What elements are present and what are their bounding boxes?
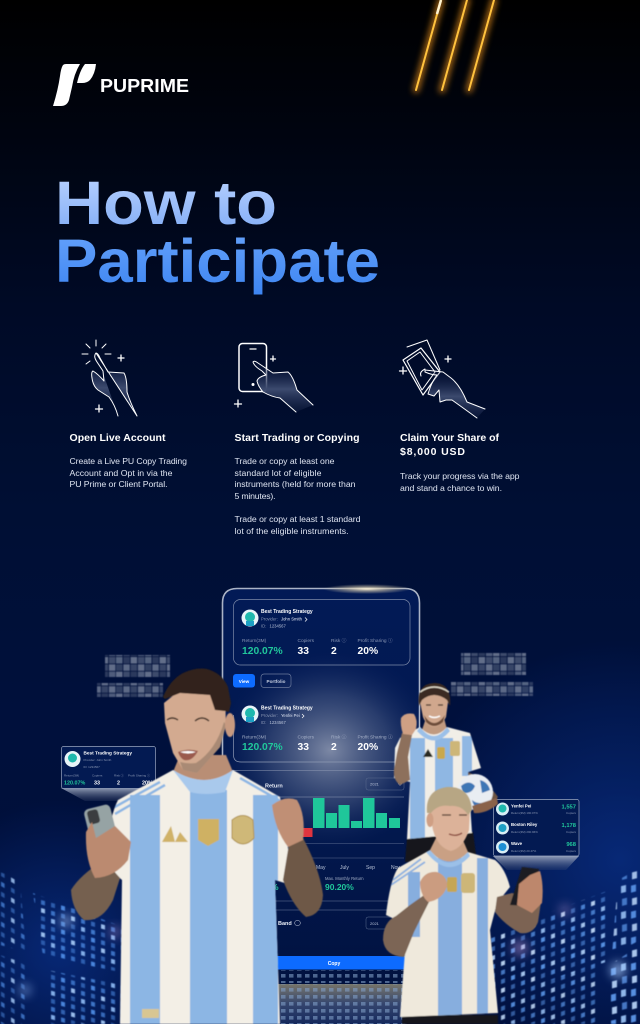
step 1 text [70,432,187,489]
step 1 text: Create a Live PU Copy Trading [70,456,187,466]
floating card: strategy: Profit Sharing ⓘ [128,772,150,778]
strategy card 1: 20% [358,646,378,657]
phone [510,867,539,906]
logo [53,64,189,106]
floating card: leaderboard: 1,178 [561,823,577,829]
title: Participate [55,227,380,295]
strategy card 1: Profit Sharing ⓘ [358,637,393,644]
floating card: leaderboard: Wave [511,841,523,846]
return chart: % [271,882,279,892]
floating card: strategy [61,746,156,801]
return chart: July [340,865,349,871]
head [419,683,450,727]
strategy card 2: 120.07% [242,742,283,753]
return chart: Sep [366,865,375,871]
LED floor: left [0,872,123,1024]
risk band row: Band [278,921,292,927]
floating card: leaderboard: Return(3M) 20.47% [511,849,537,853]
strategy card 1: John Smith [281,616,303,622]
strategy card 1: Copiers [298,638,315,644]
strategy card 2: Return(3M) [242,734,267,740]
return chart: Nov [391,865,400,871]
floating card: leaderboard: Yenfei Pei [511,804,531,808]
strategy card 1: Risk ⓘ [331,637,347,644]
icon: phone and hand [234,344,313,412]
floating card: leaderboard: Return(3M) 290.96% [511,830,538,834]
pixel blocks: right [451,653,533,696]
icon: tapping hand [82,340,137,416]
pixel blocks: left [97,655,170,697]
step 2 text: standard lot of eligible [234,468,322,478]
strategy card 2: 20% [358,742,378,753]
floating card: strategy: ID: 1234567 [84,765,100,769]
floating card: strategy: Provider: John Smith [84,758,112,762]
strategy card 2: 2 [331,742,337,753]
strategy card 1: Provider: [261,616,278,622]
strategy card 2: 1234567 [270,720,286,725]
strategy card 2: Profit Sharing ⓘ [358,734,393,740]
strategy card 2: ID: [261,720,266,725]
jersey [390,725,485,840]
strategy card 1 [234,600,410,665]
floating card: strategy: 120.07% [64,780,85,786]
copy button: Copy [328,961,340,967]
return chart: May [316,865,326,871]
logo: PUPRIME [100,76,189,96]
icon: cash and hand [400,340,485,418]
view and portfolio buttons: Portfolio [267,679,286,684]
strategy card 1: 33 [298,646,309,657]
strategy card 1: Best Trading Strategy [261,609,313,615]
floating card: strategy: Best Trading Strategy [84,750,132,756]
step 2 text: Start Trading or Copying [234,432,360,444]
return chart: 90.20% [325,882,354,892]
floating card: strategy: 20% [142,780,153,786]
strategy card 1: 2 [331,646,337,657]
step 2 text: lot of the eligible instruments. [234,526,348,536]
view and portfolio buttons [233,674,291,688]
strategy card 1: 1234567 [270,624,286,628]
hand [517,871,543,913]
floating card: leaderboard: 1,557 [561,804,576,810]
view and portfolio buttons: View [239,679,250,684]
step 2 text [234,432,361,536]
phone base panel [277,984,407,1024]
floating card: strategy: Risk ⓘ [114,772,124,778]
LED floor: right [490,868,640,1024]
left arm and hand [71,860,120,920]
strategy card 2: Yenfei Pei [281,713,300,718]
step 2 text: instruments (held for more than [234,479,356,489]
player: foreground left [71,668,323,1024]
floating card: leaderboard: 968 [566,842,577,848]
copy button [270,956,406,970]
strategy card 1: 120.07% [242,646,283,657]
step 2 text: Trade or copy at least 1 standard [234,514,361,524]
left arm and fist [383,893,430,957]
floating card: leaderboard: Boston Riley [511,822,538,827]
return chart [232,770,410,910]
strategy card 1: ID: [261,624,266,628]
jersey [112,769,289,1024]
return chart: Max. Monthly Return [325,876,364,881]
title: How to [55,169,277,237]
risk band row [278,917,404,929]
step 1 text: Open Live Account [70,432,166,444]
floating card: strategy: Copiers [92,774,103,778]
player: back with ball [390,683,498,862]
raised arm [394,733,412,785]
step 1 text: Account and Opt in via the [70,468,173,478]
strategy card 2: Copiers [298,734,315,740]
floating card: leaderboard: Copiers [566,849,577,853]
floating card: leaderboard: Copiers [566,830,577,834]
step 2 text: Trade or copy at least one [234,456,335,466]
neon light bars [416,0,494,90]
strategy card 2: Risk ⓘ [331,734,347,740]
jersey [380,850,515,1020]
right arm and fist [283,838,323,917]
head [163,668,235,773]
strategy card 2: 33 [298,742,309,753]
right arm [495,893,541,933]
strategy card 2: Provider: [261,713,278,718]
floating card: strategy: 33 [94,780,100,786]
floating card: strategy: Return(3M) [64,774,79,778]
floating card: leaderboard [493,800,579,870]
step 3 text: $8,000 USD [400,446,465,458]
ball [457,774,493,810]
floating card: strategy: 2 [117,780,120,786]
step 1 text: PU Prime or Client Portal. [70,479,168,489]
phone mockup [220,584,440,985]
step 3 text: Track your progress via the app [400,471,520,481]
floating card: leaderboard: Return(3M) 190.07% [511,811,538,815]
step 3 text: Claim Your Share of [400,432,500,444]
player: front with phone [380,787,543,1024]
return chart: 2021 [370,782,380,786]
step 2 text: 5 minutes). [234,491,276,501]
return chart: Return [265,784,283,790]
title [55,169,380,295]
strategy card 2 [234,706,410,762]
jersey badges [142,816,254,1018]
head [426,787,472,851]
floating card: leaderboard: Copiers [566,811,577,815]
step 3 text [400,432,520,493]
risk band row: 2021 [370,921,380,926]
step 3 text: and stand a chance to win. [400,483,502,493]
strategy card 2: Best Trading Strategy [261,706,313,712]
strategy card 1: Return(3M) [242,638,267,644]
